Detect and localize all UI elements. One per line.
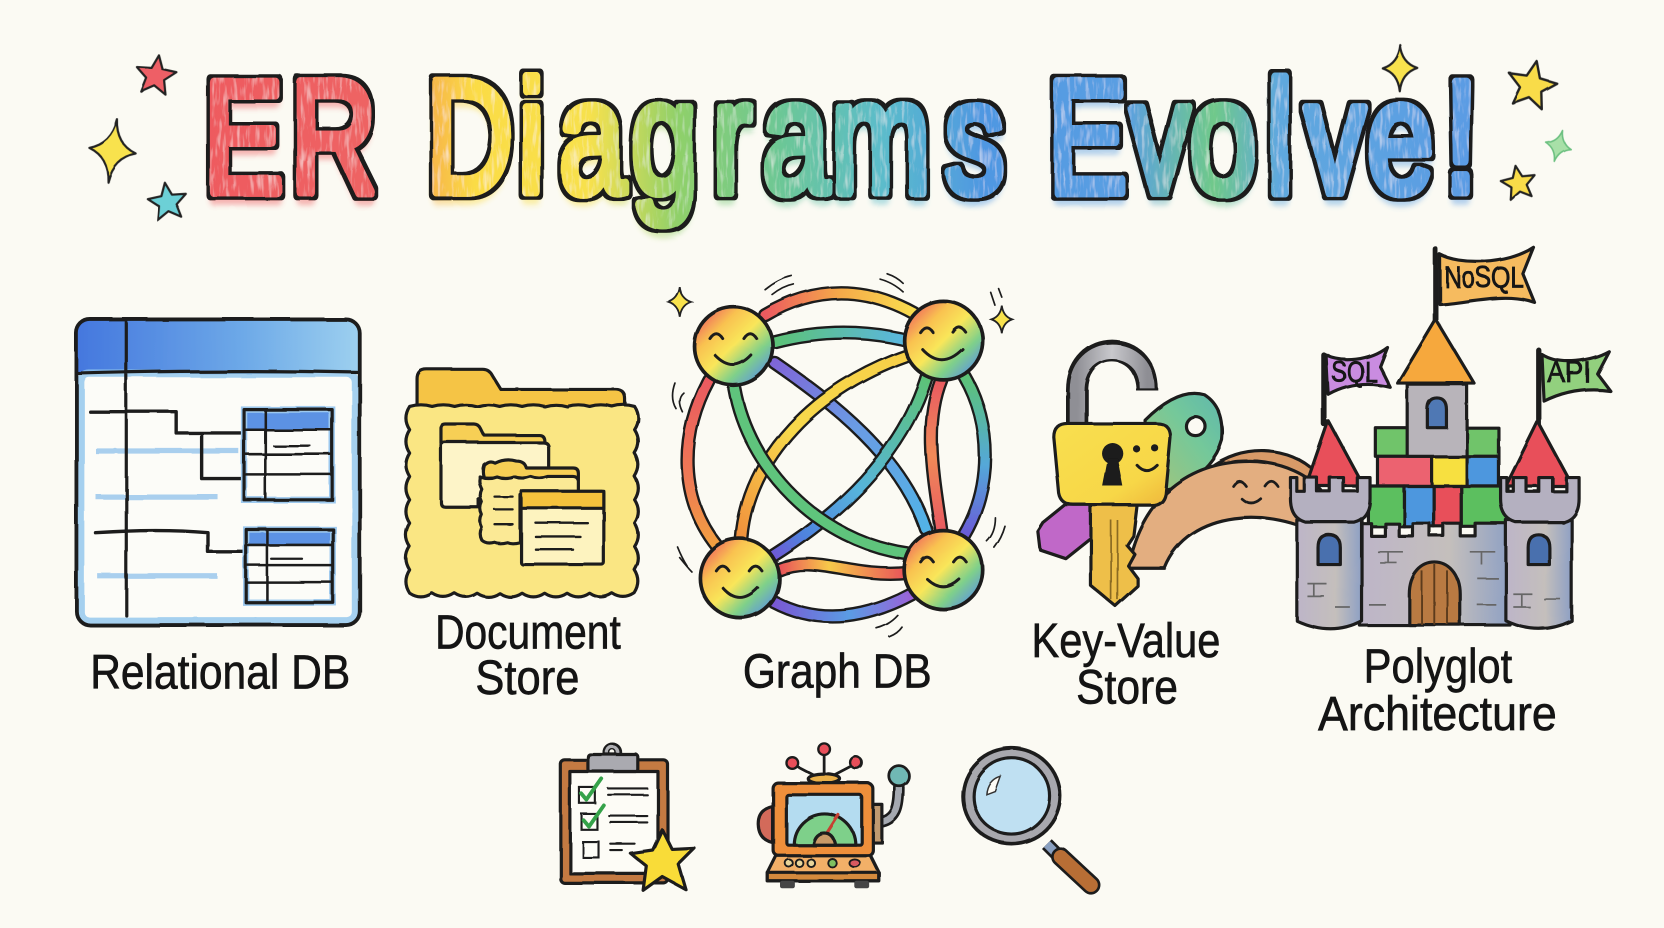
panel: document store xyxy=(406,369,638,705)
title: ER Diagrams Evolve! xyxy=(204,48,1478,226)
icon: yellow sparkle left xyxy=(84,116,141,186)
decorative title stars xyxy=(84,45,1574,222)
icon: gauge robot machine xyxy=(758,743,909,888)
icon: small yellow star xyxy=(1499,163,1538,201)
icon: yellow sparkle top right xyxy=(1382,45,1417,91)
flag: NoSQL xyxy=(1440,247,1535,305)
label: document store: Document xyxy=(435,606,621,659)
label: key-value store: Key-Value xyxy=(1032,615,1220,668)
label: key-value store xyxy=(1032,615,1220,715)
panel: key-value store xyxy=(1032,351,1321,715)
label: polyglot architecture xyxy=(1318,640,1557,741)
icon: castle xyxy=(1290,247,1610,629)
label: polyglot architecture: Architecture xyxy=(1318,688,1557,741)
label: document store: Store xyxy=(475,652,579,705)
flag poles xyxy=(1324,249,1539,424)
links between nodes xyxy=(688,293,985,616)
icon: clipboard checklist with star xyxy=(560,744,694,890)
node: bottom left smiley xyxy=(700,539,779,618)
icon: padlock, key and bridge xyxy=(1038,351,1321,606)
right tower xyxy=(1501,421,1579,629)
node: top right smiley xyxy=(904,301,983,380)
panel: graph db xyxy=(669,274,1012,699)
flag: SQL xyxy=(1327,347,1390,395)
flag: API: API xyxy=(1547,356,1591,389)
panel: relational db xyxy=(76,319,360,700)
label: document store xyxy=(435,606,621,705)
flag: SQL: SQL xyxy=(1332,356,1377,389)
panel: polyglot architecture xyxy=(1290,247,1610,741)
diagram: connected smiling nodes xyxy=(669,274,1012,637)
label: relational db: Relational DB xyxy=(90,647,350,700)
centre tower xyxy=(1407,384,1467,456)
left tower xyxy=(1290,421,1370,629)
icon: green sparkle xyxy=(1541,127,1574,164)
flag: API xyxy=(1542,351,1610,401)
label: graph db: Graph DB xyxy=(743,646,932,699)
node: top left smiley xyxy=(694,307,773,385)
icon: red star xyxy=(134,53,179,96)
main wall xyxy=(1359,523,1510,625)
door xyxy=(1409,562,1460,625)
icon: relational table xyxy=(76,319,360,625)
coloured block wall xyxy=(1368,428,1508,526)
icon: magnifying glass xyxy=(963,748,1091,885)
icon: yellow star right xyxy=(1503,56,1560,111)
icon: teal star xyxy=(146,180,189,222)
label: polyglot architecture: Polyglot xyxy=(1364,640,1512,693)
flag: NoSQL: NoSQL xyxy=(1444,262,1524,295)
node: bottom right smiley xyxy=(904,531,983,609)
motion lines and sparkles xyxy=(669,274,1012,637)
label: key-value store: Store xyxy=(1076,662,1178,715)
icon: scalloped folder xyxy=(406,369,638,597)
